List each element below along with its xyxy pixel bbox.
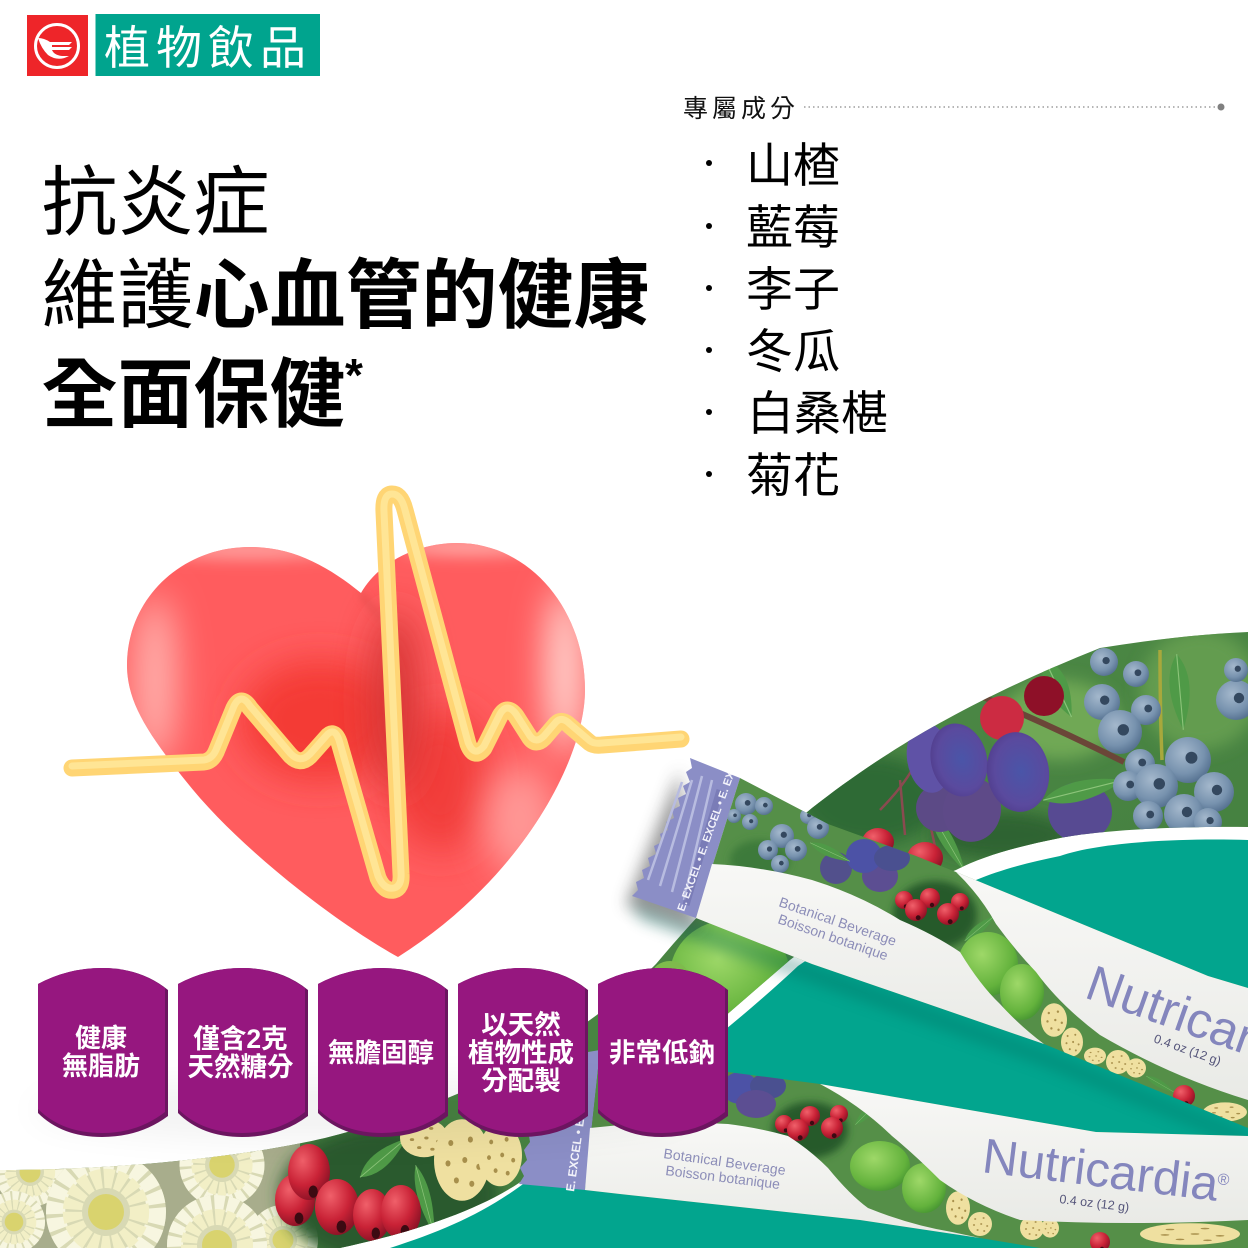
wrapper text: crimp: E. EXCEL • E. EXCEL • E. EXCEL bbox=[676, 749, 745, 913]
crimp text: E. EXCEL • E. bbox=[563, 1115, 588, 1192]
tab: 2g natural sugar: 僅含2克 bbox=[193, 1024, 288, 1054]
soft shadow above tabs bbox=[30, 1080, 690, 1140]
white panel: left bbox=[696, 864, 1044, 1044]
title: 維護心血管的健康 bbox=[42, 254, 650, 339]
ingredient list: 李子 bbox=[746, 263, 840, 316]
wrapper text: brand: Nutricardia bbox=[980, 1129, 1222, 1212]
branch bbox=[976, 694, 1124, 762]
twigs bbox=[879, 771, 936, 846]
sachet shadow bbox=[632, 900, 1248, 1146]
icon: 3D heart bbox=[127, 539, 585, 957]
tab: natural plant ingredients: 分配製 bbox=[481, 1066, 561, 1096]
wrapper text: beverage: Botanical Beverage bbox=[663, 1145, 787, 1178]
tab: fat free: 健康 bbox=[75, 1023, 127, 1053]
fruit: hawthorn and leaves bbox=[280, 1125, 500, 1248]
panel: botanical photo band bbox=[0, 620, 1248, 1248]
ingredient list: 山楂 bbox=[746, 139, 840, 192]
fruit: cherries bbox=[980, 696, 1024, 740]
product: lower sachet bbox=[519, 1050, 1248, 1248]
tab: fat free: 無脂肪 bbox=[62, 1051, 140, 1081]
crimped end bbox=[519, 1050, 600, 1190]
tab: natural plant ingredients bbox=[458, 968, 588, 1137]
product: upper sachet bbox=[626, 749, 1248, 1130]
white panel: right bbox=[956, 872, 1248, 1100]
wrapper text: brand: ® bbox=[1217, 1171, 1230, 1189]
ingredient list: 藍莓 bbox=[746, 201, 840, 254]
ingredient list bbox=[706, 139, 888, 502]
ingredient list: 菊花 bbox=[746, 449, 840, 502]
ingredient list: 冬瓜 bbox=[746, 325, 840, 378]
ingredient list: 白桑椹 bbox=[747, 387, 888, 440]
fruit: red hawthorn above sachet bbox=[863, 828, 894, 848]
leaf background patches bbox=[800, 755, 940, 845]
badge: brand logo bbox=[27, 15, 88, 76]
white panel: left bbox=[585, 1123, 980, 1238]
crimp shadow bbox=[626, 770, 700, 930]
tab: very low sodium bbox=[598, 968, 728, 1137]
tab: no cholesterol: 無膽固醇 bbox=[328, 1038, 434, 1068]
wrapper text: brand: 0.4 oz (12 g) bbox=[1059, 1192, 1130, 1215]
heading: exclusive ingredients: 專屬成分 bbox=[683, 95, 799, 123]
fruit: green melon bbox=[672, 924, 788, 1014]
wrapper text: beverage: Boisson botanique bbox=[776, 911, 890, 963]
panel: teal background bbox=[390, 840, 1248, 1248]
tab: fat free bbox=[38, 968, 168, 1137]
tab: very low sodium: 非常低鈉 bbox=[609, 1038, 715, 1068]
badge: category label: 植物飲品 bbox=[104, 22, 312, 74]
tab: 2g natural sugar: 天然糖分 bbox=[188, 1052, 294, 1082]
fruit: white mulberries bbox=[400, 1122, 444, 1158]
tab: 2g natural sugar bbox=[178, 968, 308, 1137]
heading: exclusive ingredients bbox=[683, 95, 1224, 123]
fruit: blueberries bbox=[1090, 648, 1118, 676]
wrapper text: beverage: Boisson botanique bbox=[665, 1162, 781, 1192]
wrapper text: brand: 0.4 oz (12 g) bbox=[1152, 1032, 1223, 1068]
product photo strip bbox=[690, 770, 1248, 1130]
title bbox=[42, 161, 650, 438]
title: 抗炎症 bbox=[42, 161, 270, 246]
tab: natural plant ingredients: 植物性成 bbox=[468, 1038, 574, 1068]
tab: no cholesterol bbox=[318, 968, 448, 1137]
icon: heartbeat line bbox=[72, 494, 681, 890]
title: 全面保健 bbox=[42, 353, 346, 438]
title: * bbox=[345, 349, 363, 401]
crimped end bbox=[632, 758, 740, 918]
fruit: plums bbox=[916, 788, 949, 832]
white panel: right bbox=[820, 1084, 1248, 1223]
tab: natural plant ingredients: 以天然 bbox=[481, 1010, 561, 1040]
product photo strip bbox=[585, 1050, 1248, 1248]
wrapper text: beverage: Botanical Beverage bbox=[777, 894, 899, 949]
flowers bbox=[0, 1168, 64, 1206]
